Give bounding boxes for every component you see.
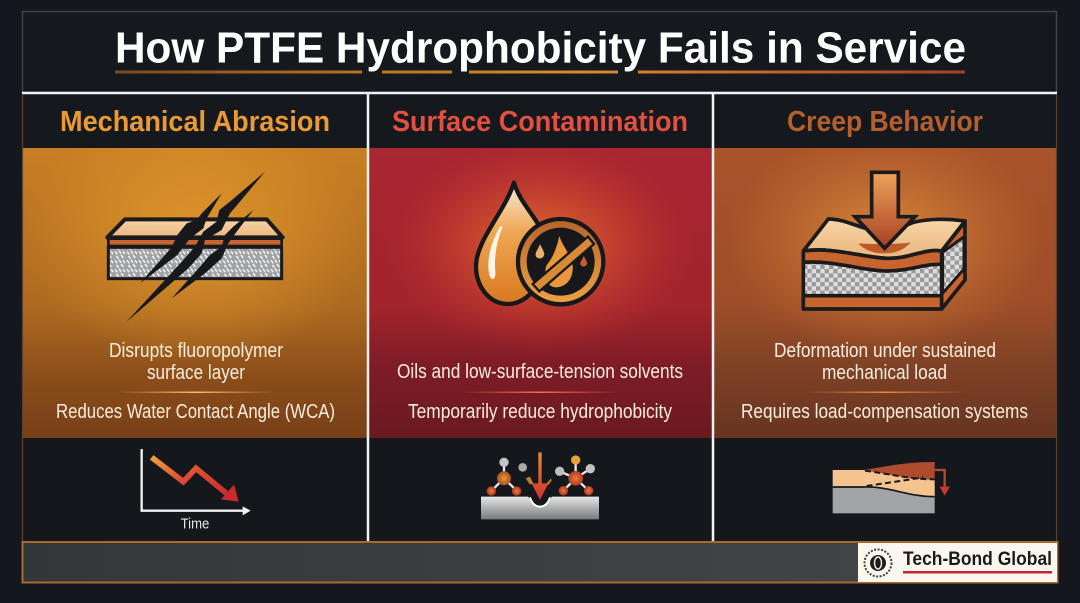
- heading: Surface Contamination: Surface Contamination: [392, 106, 688, 138]
- panel: Creep Behavior: [714, 94, 1057, 541]
- text: temporary reduction: Temporarily reduce hydrophobicity: [408, 401, 672, 423]
- icon: molecules adsorbing on surface: [481, 452, 599, 519]
- panel: Surface Contamination: [369, 94, 713, 541]
- icon: oil drop with prohibition sign: [476, 183, 603, 304]
- chart: contact angle falling over time: Time: [181, 516, 209, 532]
- panel: Mechanical Abrasion: [22, 94, 368, 541]
- title: How PTFE Hydrophobicity Fails in Service: [115, 24, 966, 72]
- text: surface layer effect: surface layer: [147, 362, 245, 384]
- text: deformation under load: Deformation under sustained: [774, 340, 996, 362]
- heading: Creep Behavior: Creep Behavior: [787, 106, 983, 138]
- logo: Tech-Bond Global: [858, 543, 1057, 582]
- text: deformation under load: mechanical load: [822, 362, 947, 384]
- text: deformation under load: [774, 340, 996, 384]
- logo seal: [864, 550, 892, 576]
- heading: Mechanical Abrasion: Mechanical Abrasion: [60, 106, 330, 138]
- icon: seal layer creep diagram: [833, 462, 950, 513]
- icon: scratched layered block: [107, 172, 283, 322]
- logo wordmark: Tech-Bond Global: [903, 548, 1052, 570]
- text: oils and solvents: Oils and low-surface-tension solvents: [397, 361, 683, 383]
- chart: contact angle falling over time: [142, 449, 251, 532]
- title underline: [115, 70, 965, 74]
- text: surface layer effect: Disrupts fluoropolymer: [109, 340, 283, 362]
- text: surface layer effect: [109, 340, 283, 384]
- title block: [22, 12, 1056, 92]
- dividers: [22, 93, 1057, 541]
- icon: deforming block under load: [803, 172, 965, 309]
- text: load compensation: Requires load-compensation systems: [741, 401, 1028, 423]
- logo underline: [903, 571, 1052, 574]
- footer bar: [22, 542, 1058, 582]
- text: WCA effect: Reduces Water Contact Angle (WCA): [56, 401, 335, 423]
